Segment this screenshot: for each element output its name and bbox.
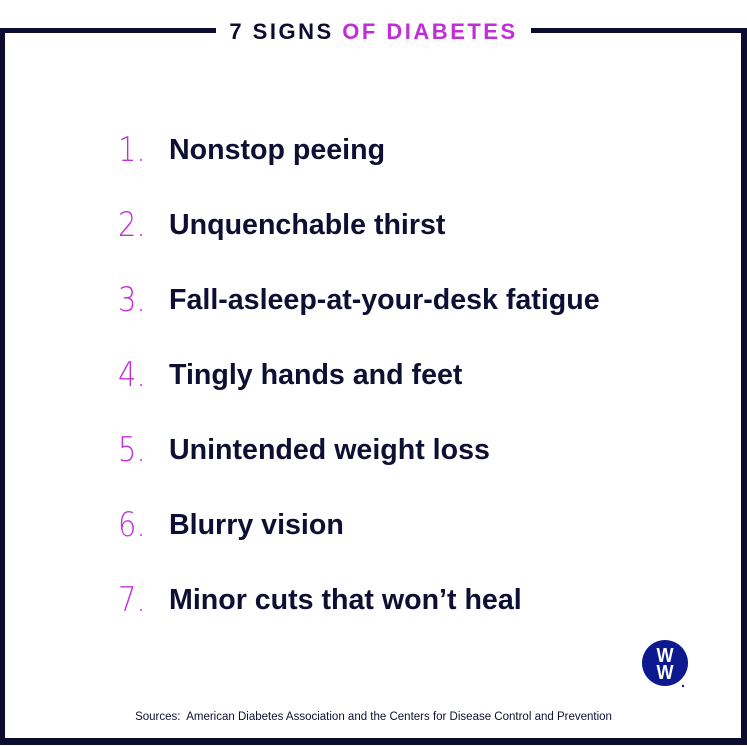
item 1: Nonstop peeing — [169, 134, 385, 166]
item 2: 2. — [118, 205, 146, 245]
icon: WW logo: W — [657, 662, 674, 684]
item 3: 3. — [118, 280, 146, 320]
item 1 — [118, 130, 385, 170]
item 7: Minor cuts that won’t heal — [169, 584, 522, 616]
item 4: 4. — [118, 355, 146, 395]
item 2: Unquenchable thirst — [169, 209, 445, 241]
item 4 — [118, 355, 462, 395]
item 6: 6. — [118, 505, 146, 545]
item 4: Tingly hands and feet — [169, 359, 462, 391]
item 5: Unintended weight loss — [169, 434, 490, 466]
list — [118, 130, 600, 620]
title: 7 SIGNS OF DIABETES — [229, 19, 518, 44]
sources: Sources: American Diabetes Association and the Centers for Disease Control and Prevention — [135, 711, 612, 723]
icon: WW logo: W — [657, 645, 674, 667]
item 1: 1. — [118, 130, 146, 170]
item 6: Blurry vision — [169, 509, 344, 541]
item 7 — [118, 580, 522, 620]
item 7: 7. — [118, 580, 146, 620]
item 3: Fall-asleep-at-your-desk fatigue — [169, 284, 600, 316]
item 2 — [118, 205, 446, 245]
item 5: 5. — [118, 430, 146, 470]
icon: WW logo — [642, 640, 688, 688]
item 5 — [118, 430, 490, 470]
item 6 — [118, 505, 344, 545]
